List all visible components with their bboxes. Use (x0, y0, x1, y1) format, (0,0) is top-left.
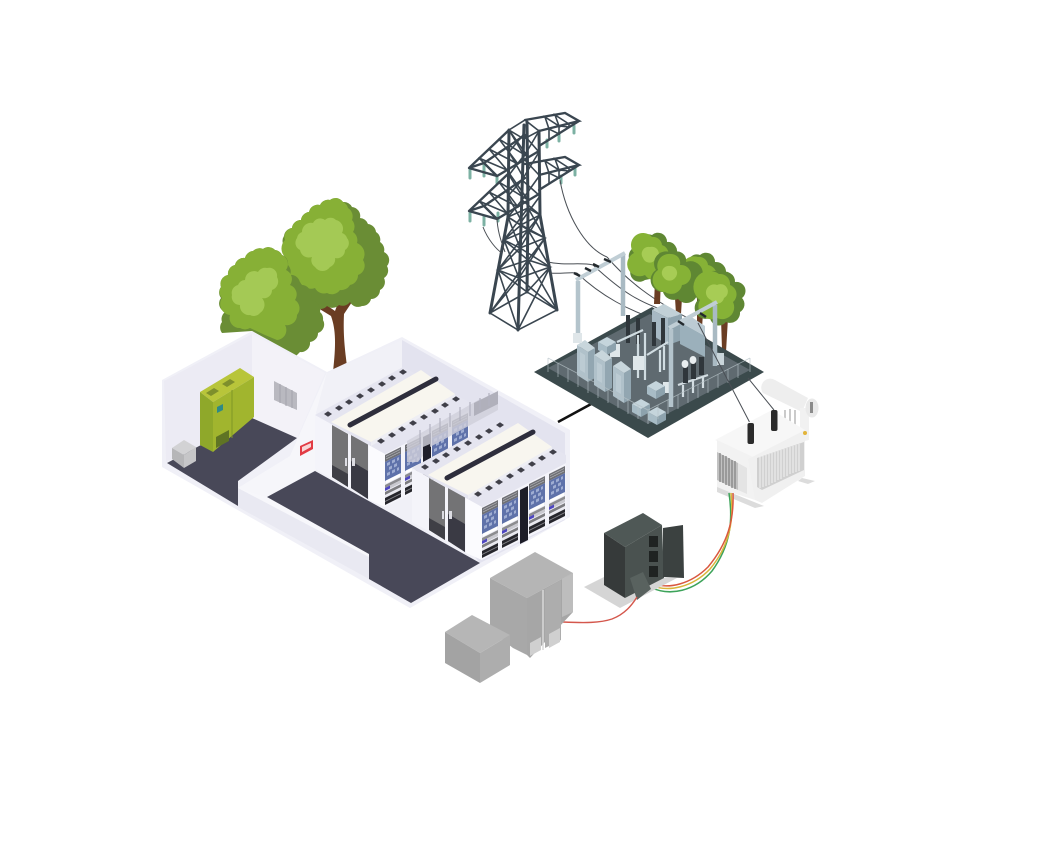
bushings (748, 410, 778, 444)
tower bracing (490, 120, 557, 330)
open door (663, 525, 684, 578)
breakers (649, 536, 658, 577)
tree trunks (654, 278, 728, 352)
transmission tower (469, 113, 579, 330)
tree: large (281, 198, 389, 372)
lines: substation to transformer (698, 323, 774, 423)
server row: front (412, 420, 567, 560)
fence (548, 358, 750, 424)
uninterruptible power cabinet (200, 368, 254, 452)
multicolour cables (650, 493, 733, 592)
electrical distribution cabinet (584, 513, 684, 608)
tree 1 (627, 233, 681, 282)
conservator tank (761, 379, 818, 442)
red cable (563, 597, 637, 623)
gantry 2 (669, 302, 724, 407)
cabinet body (604, 513, 664, 598)
small trees behind substation (627, 233, 746, 352)
data centre building (162, 331, 570, 608)
grey generator cabinet (490, 552, 573, 658)
switchgear cabinets (577, 340, 631, 403)
transformer (715, 379, 818, 508)
overhead power lines (483, 180, 698, 323)
cable: building to substation (558, 403, 593, 422)
tree: small (219, 247, 324, 356)
room 2: walls and floor (267, 340, 565, 603)
grey box (445, 615, 510, 683)
lower flap (630, 572, 651, 600)
radiators (717, 442, 804, 494)
small equipment boxes (632, 381, 666, 425)
platform (534, 307, 764, 438)
circuit breakers (678, 356, 708, 397)
tree 2 (651, 251, 703, 303)
isolator frames (617, 330, 668, 380)
wall vent (274, 381, 297, 410)
red fire sign (300, 440, 313, 456)
partition wall (238, 372, 369, 579)
small switch boxes (610, 344, 670, 393)
tree 3 (676, 253, 726, 300)
electrical substation (534, 253, 764, 438)
gantry 1 (573, 253, 625, 343)
yard floor (548, 314, 750, 424)
feet (717, 478, 815, 508)
tree 4 (693, 271, 746, 326)
grey floor box (172, 440, 196, 468)
rear insulators (626, 315, 665, 346)
base plate (584, 577, 677, 608)
transformer body (715, 410, 805, 503)
warning label (803, 431, 807, 435)
rear equipment cabinets (652, 304, 705, 357)
tower arms (469, 113, 579, 219)
tower main legs (490, 122, 557, 330)
server row: back (315, 367, 470, 507)
containment duct (407, 391, 498, 463)
back box (598, 337, 616, 355)
building shell (162, 331, 570, 608)
room 1: walls and floor (164, 334, 325, 506)
insulators (470, 126, 575, 225)
